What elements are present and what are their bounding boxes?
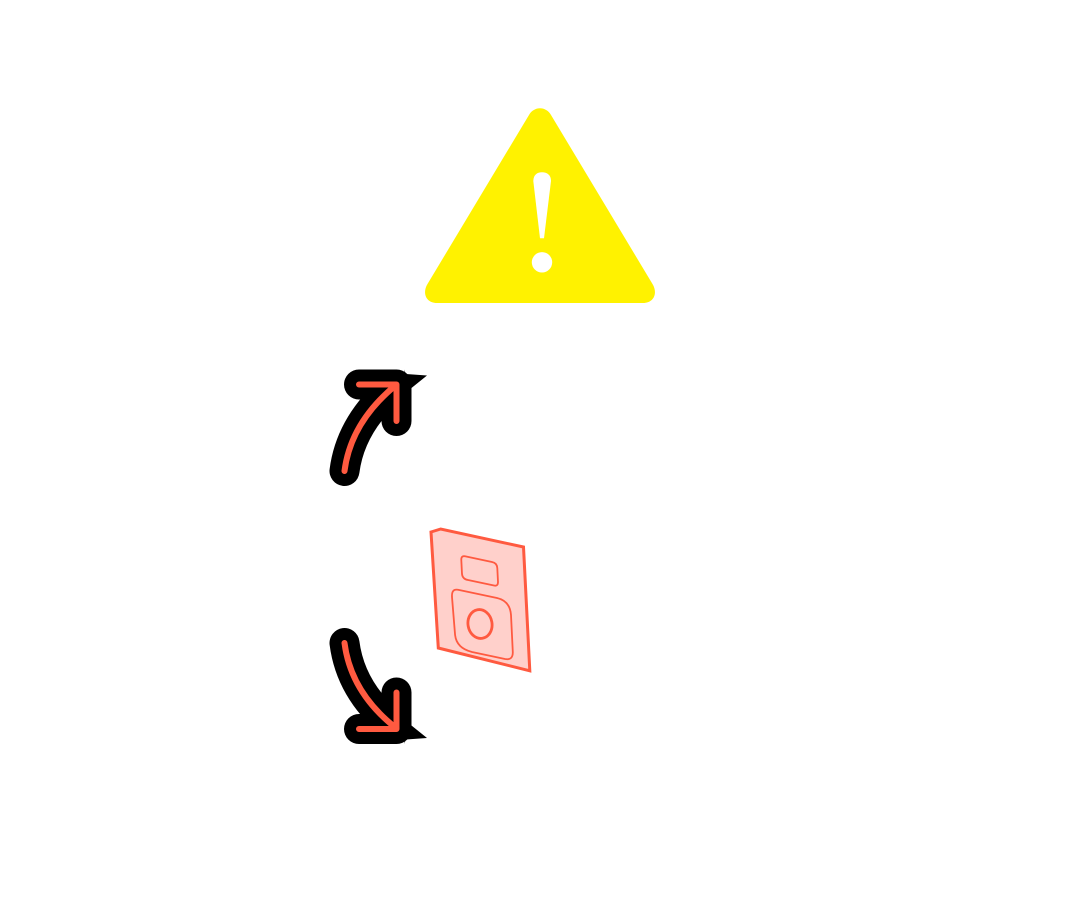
icon: tilted document card <box>431 529 530 671</box>
arrow: curved up-right <box>344 370 427 471</box>
icon: yellow warning triangle <box>425 108 655 303</box>
arrow: curved down-right <box>344 643 427 744</box>
